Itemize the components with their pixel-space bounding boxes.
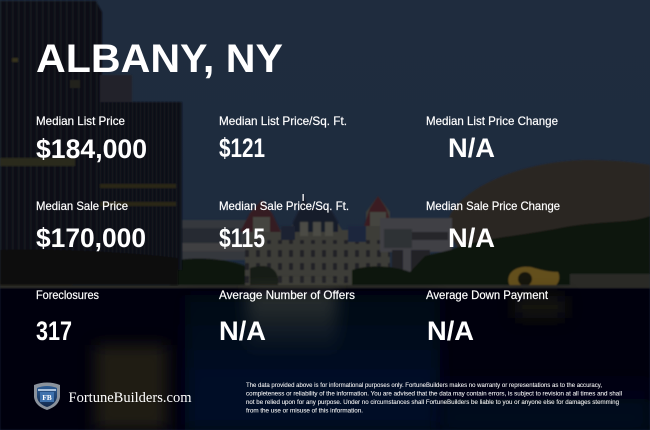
stat: average down payment: Average Down Payment: [426, 288, 549, 302]
logo: FortuneBuilders: [34, 382, 192, 410]
stat: median list price: $184,000: [36, 134, 147, 164]
left tower: [0, 1, 102, 260]
water: [0, 288, 650, 430]
stat: median list price per sq ft: Median List Price/Sq. Ft.: [219, 114, 347, 128]
stat: median list price change: N/A: [448, 133, 495, 163]
shore line: [0, 285, 650, 288]
stat: average number of offers: Average Number of Offers: [219, 288, 355, 302]
disclaimer text: The data provided above is for informational purposes only. FortuneBuilders makes no warranty or representations as to the accuracy,: [246, 382, 602, 389]
disclaimer text: completeness or reliability of the information. You are advised that the data may contain errors, is subject to revision at all times and shall: [246, 390, 622, 398]
modern building right of capitol: [380, 218, 452, 252]
stat: average number of offers: [219, 288, 355, 346]
stat: median sale price change: N/A: [448, 223, 495, 253]
right waterfront buildings: [570, 274, 650, 285]
navy water reflection: [185, 295, 440, 430]
stat: median sale price change: Median Sale Price Change: [426, 199, 560, 213]
stat: average number of offers: N/A: [219, 316, 266, 346]
gold reflection of the towers: [95, 345, 167, 430]
stat: median sale price per sq ft: Median Sale Price/Sq. Ft.: [219, 199, 349, 213]
stat: median list price per sq ft: [219, 114, 347, 163]
capitol building: [245, 195, 390, 285]
logo: FortuneBuilders: FortuneBuilders.com: [68, 390, 192, 406]
stat: median sale price per sq ft: [219, 194, 349, 253]
icon: shield: [34, 382, 60, 410]
disclaimer text: [246, 382, 622, 414]
stat: median list price change: Median List Price Change: [426, 114, 558, 128]
tree line: [170, 259, 245, 285]
yellow sculpture: [508, 267, 559, 291]
stat: median sale price: Median Sale Price: [36, 199, 128, 213]
title: ALBANY, NY: [36, 37, 283, 81]
dark trees at tower base: [0, 249, 178, 285]
disclaimer text: not be relied upon for any purpose. Under no circumstances shall FortuneBuilders be liable to you or anyone else for damages stemming: [246, 399, 620, 406]
stat: median sale price: [36, 199, 146, 253]
stat: median sale price: $170,000: [36, 223, 146, 253]
stat: median list price change: [426, 114, 558, 163]
stat: foreclosures: [36, 288, 99, 346]
stat: median list price: [36, 114, 147, 164]
stat: average down payment: N/A: [427, 316, 474, 346]
low building left of capitol: [181, 220, 247, 260]
stat: foreclosures: Foreclosures: [36, 288, 99, 302]
second tower: [100, 102, 182, 270]
stat: median list price per sq ft: $121: [219, 133, 265, 163]
stat: foreclosures: 317: [36, 316, 72, 346]
stat: average down payment: [426, 288, 549, 346]
stat: median sale price per sq ft: $115: [219, 223, 265, 253]
sculpture reflection: [515, 296, 565, 318]
capitol reflection: [247, 290, 337, 355]
small block behind towers: [100, 75, 132, 103]
dome: [448, 160, 650, 262]
stat: median sale price change: [426, 199, 560, 253]
icon: shield: FB: [42, 393, 52, 402]
stat: median list price: Median List Price: [36, 114, 125, 128]
disclaimer text: from the use or misuse of this information.: [246, 408, 363, 414]
